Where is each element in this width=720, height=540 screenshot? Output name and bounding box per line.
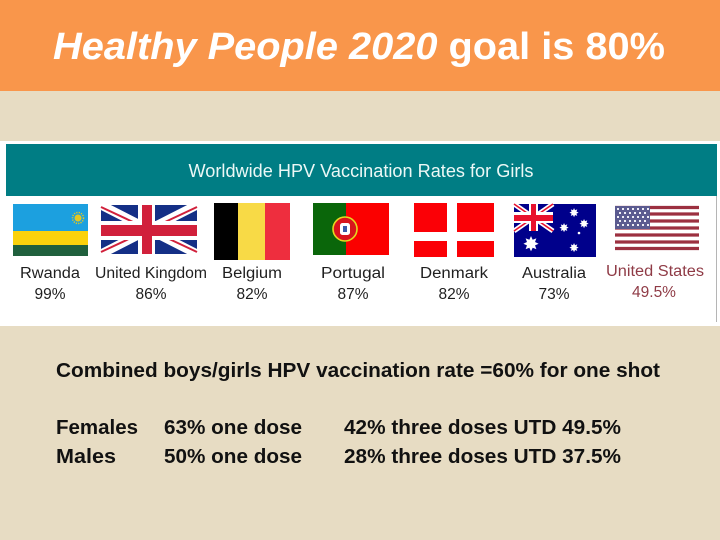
panel heading: Worldwide HPV Vaccination Rates for Girls bbox=[188, 161, 534, 181]
country labels: United States bbox=[606, 263, 704, 280]
males row: Males bbox=[56, 446, 116, 468]
females row: Females bbox=[56, 417, 138, 439]
country labels: Rwanda bbox=[20, 265, 80, 282]
title banner: Healthy People 2020 goal is 80% bbox=[53, 26, 665, 68]
country labels: Belgium bbox=[222, 265, 282, 282]
females row: 42% three doses UTD 49.5% bbox=[344, 417, 621, 439]
flag: Australia: ✸ bbox=[579, 217, 589, 231]
flag: United States bbox=[615, 206, 699, 250]
flag: Denmark bbox=[414, 203, 494, 257]
country labels: Denmark bbox=[420, 265, 488, 282]
country labels: Australia bbox=[522, 265, 586, 282]
country labels: United Kingdom bbox=[95, 265, 207, 282]
flag: Australia: ✸ bbox=[523, 234, 539, 256]
flag: Belgium bbox=[214, 203, 290, 260]
country labels: Portugal bbox=[321, 265, 385, 282]
panel heading bbox=[6, 144, 717, 196]
combined rate text: Combined boys/girls HPV vaccination rate =60% for one shot bbox=[56, 360, 660, 382]
flag: Australia: ✸ bbox=[559, 221, 569, 235]
flag: Australia: ✸ bbox=[569, 241, 579, 255]
country labels bbox=[20, 263, 704, 303]
males row: 28% three doses UTD 37.5% bbox=[344, 446, 621, 468]
males row bbox=[56, 446, 621, 468]
panel: worldwide vaccination rates bbox=[0, 141, 720, 326]
flag: United Kingdom bbox=[101, 205, 197, 254]
flag: Australia bbox=[514, 204, 596, 257]
country labels: 82% bbox=[236, 286, 268, 303]
females row bbox=[56, 417, 621, 439]
title banner bbox=[0, 0, 720, 91]
country labels: 99% bbox=[34, 286, 66, 303]
males row: 50% one dose bbox=[164, 446, 302, 468]
flag: Rwanda bbox=[13, 204, 88, 256]
flag: Australia: ✸ bbox=[569, 206, 579, 220]
country labels: 87% bbox=[337, 286, 369, 303]
flag: Portugal bbox=[313, 203, 389, 255]
country labels: 73% bbox=[538, 286, 570, 303]
country labels: 82% bbox=[438, 286, 470, 303]
country labels: 86% bbox=[135, 286, 167, 303]
females row: 63% one dose bbox=[164, 417, 302, 439]
country labels: 49.5% bbox=[632, 284, 676, 301]
